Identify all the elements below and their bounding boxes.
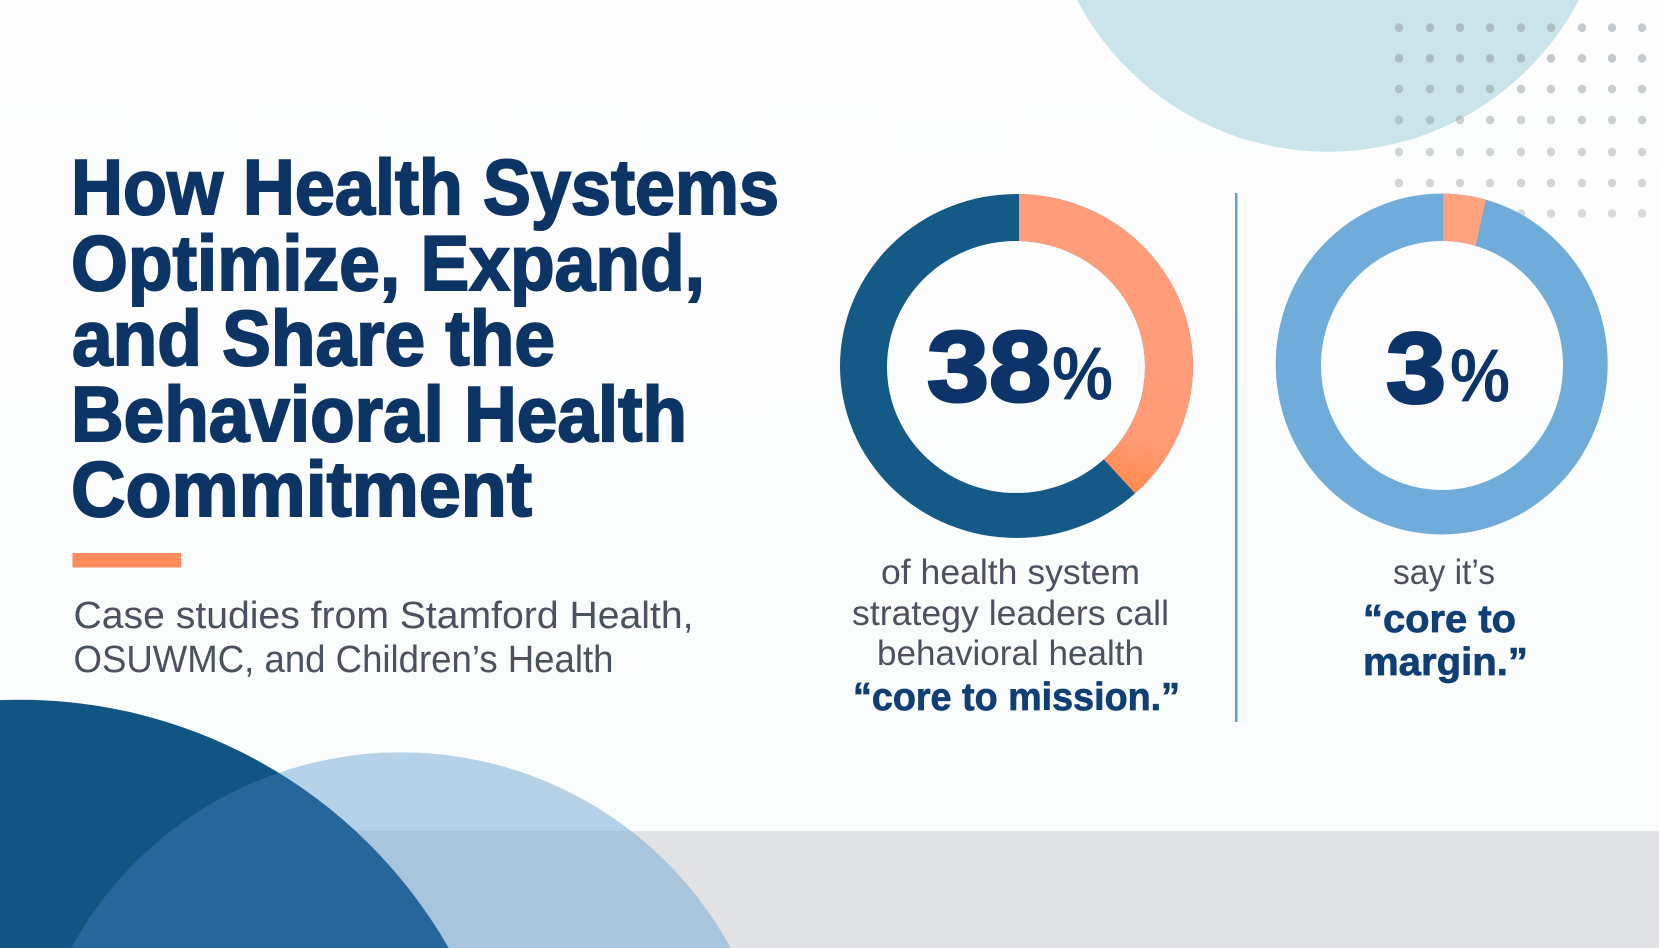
title xyxy=(71,143,779,533)
decorative circle: top right teal xyxy=(1077,0,1579,152)
caption: 38%: strategy leaders call xyxy=(852,594,1169,633)
title: Optimize, Expand, xyxy=(71,219,705,307)
caption: 38%: “core to mission.” xyxy=(853,676,1180,719)
dot grid xyxy=(1395,23,1646,218)
subtitle: Case studies from Stamford Health, xyxy=(74,595,694,637)
decorative circles: bottom left overlapping blues xyxy=(0,700,731,948)
title: How Health Systems xyxy=(71,143,779,231)
stat: 38%: 38 xyxy=(927,311,1051,423)
donut chart: 3% core to margin xyxy=(1276,194,1608,535)
donut chart: 38% core to mission xyxy=(840,194,1193,538)
caption: 38% xyxy=(852,553,1180,719)
title: Commitment xyxy=(71,445,532,533)
caption: 3%: margin.” xyxy=(1363,641,1528,684)
stat: 38%: % xyxy=(1052,332,1113,416)
vertical divider xyxy=(1235,193,1238,722)
stat: 38% xyxy=(927,311,1113,423)
title: Behavioral Health xyxy=(71,370,687,458)
caption: 38%: of health system xyxy=(881,553,1140,592)
subtitle: OSUWMC, and Children’s Health xyxy=(74,639,614,681)
stat: 3%: % xyxy=(1450,334,1510,418)
stat: 3% xyxy=(1386,312,1510,424)
caption: 3% xyxy=(1363,553,1528,684)
accent bar xyxy=(72,553,181,568)
caption: 3%: “core to xyxy=(1363,598,1516,641)
caption: 3%: say it’s xyxy=(1393,553,1495,592)
stat: 3%: 3 xyxy=(1386,312,1446,424)
subtitle xyxy=(74,595,694,681)
caption: 38%: behavioral health xyxy=(877,634,1144,673)
title: and Share the xyxy=(72,294,555,382)
footer band xyxy=(0,831,1659,948)
